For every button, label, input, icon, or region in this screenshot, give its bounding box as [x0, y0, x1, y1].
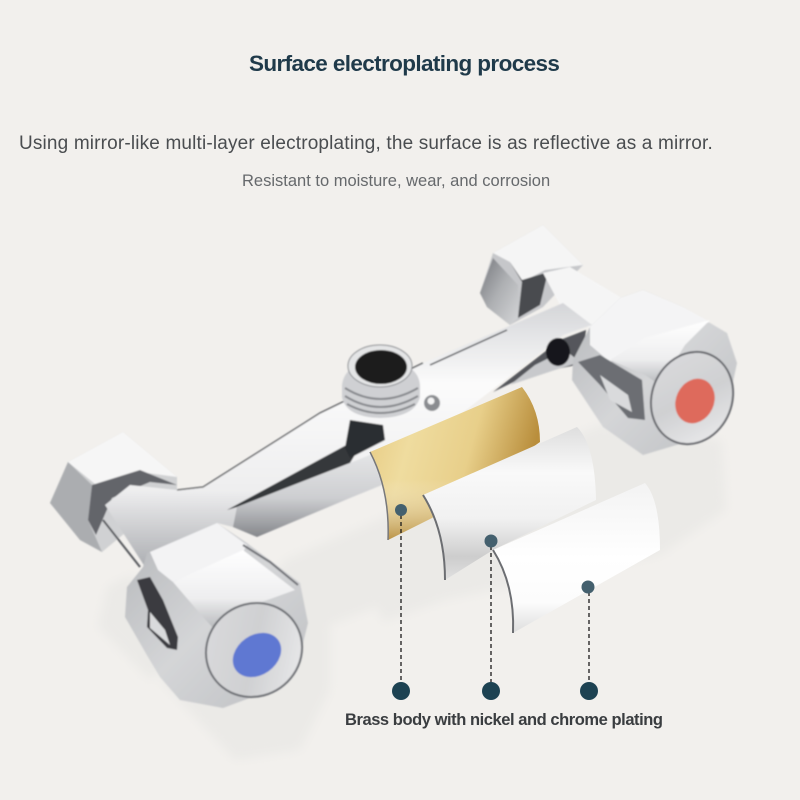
left handle face: [187, 584, 321, 716]
left handle: [125, 523, 321, 716]
red cap: [668, 372, 722, 430]
subtitle line: Resistant to moisture, wear, and corrosion: [242, 172, 550, 190]
caption: Brass body with nickel and chrome plating: [345, 711, 663, 729]
layer: chrome: [493, 483, 660, 633]
main arm: [103, 303, 592, 570]
plating layers: [370, 387, 660, 633]
shadow under faucet: [98, 425, 726, 760]
threaded outlet: [342, 345, 440, 418]
left nut: [50, 432, 177, 552]
side port: [493, 330, 586, 392]
right handle face: [637, 339, 747, 457]
layer: brass: [370, 387, 540, 540]
title: Surface electroplating process: [249, 51, 559, 76]
back tube: [543, 267, 622, 330]
right handle: [572, 290, 747, 457]
blue cap: [224, 624, 290, 686]
top nut: [480, 225, 583, 325]
leader lines and dots: [392, 504, 598, 700]
description line: Using mirror-like multi-layer electroplating, the surface is as reflective as a mirror.: [19, 133, 713, 154]
layer: nickel: [423, 427, 596, 580]
